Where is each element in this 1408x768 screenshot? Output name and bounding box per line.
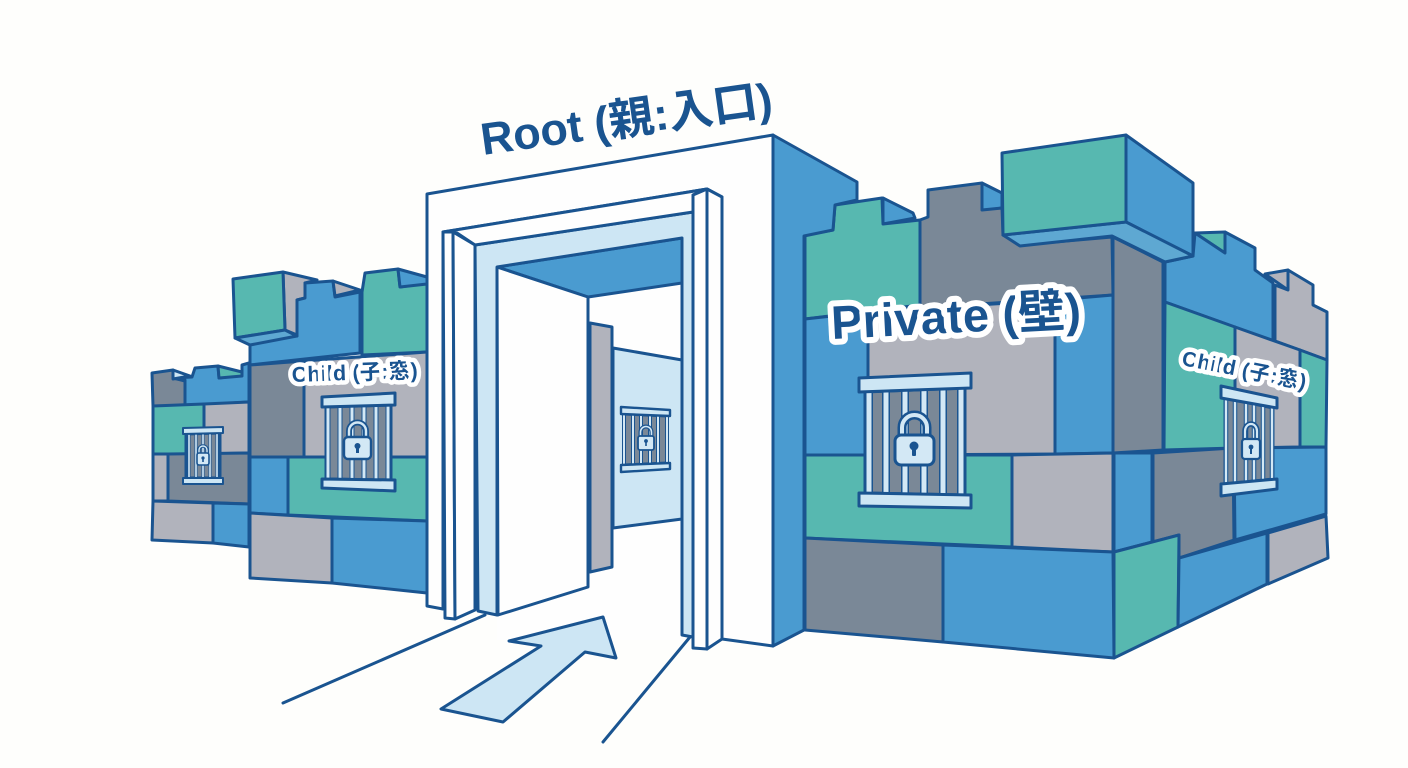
arrow: entry direction bbox=[441, 617, 616, 722]
panel: large overhanging merlon block bbox=[1002, 135, 1193, 262]
title: root label: Root (親:入口) bbox=[477, 73, 776, 165]
doorway interior bbox=[497, 238, 682, 640]
ceiling bbox=[497, 238, 682, 297]
panel: main right castle wall, front face bbox=[805, 183, 1114, 658]
left frame strips bbox=[443, 232, 475, 619]
merlon block bbox=[233, 272, 297, 345]
right frame strips bbox=[693, 189, 722, 649]
icon: middle window with padlock bbox=[322, 393, 395, 491]
icon: right wall window with padlock bbox=[1221, 386, 1277, 496]
panel: root entrance gate bbox=[427, 135, 857, 649]
open door panel bbox=[497, 267, 588, 615]
floor perspective lines bbox=[283, 615, 690, 742]
icon: corridor window with padlock bbox=[621, 407, 670, 472]
label: private wall: Private (壁) bbox=[830, 283, 1082, 349]
label: right child window: Child (子:窓) bbox=[1180, 347, 1308, 394]
door frame reveal bbox=[475, 212, 693, 637]
icon: far window with padlock bbox=[183, 427, 223, 484]
frame top face bbox=[443, 189, 707, 245]
panel: right castle wall, side face bbox=[1113, 232, 1328, 658]
corridor back wall bbox=[613, 348, 682, 528]
panel: middle left castle wall bbox=[233, 269, 427, 593]
gate side face bbox=[773, 135, 857, 646]
panel: far left castle wall bbox=[152, 363, 249, 547]
gate front face bbox=[427, 135, 773, 646]
label: left child window: Child (子:窓) bbox=[291, 359, 418, 387]
grey pillar bbox=[590, 323, 612, 572]
icon: main wall window with padlock bbox=[859, 373, 971, 508]
